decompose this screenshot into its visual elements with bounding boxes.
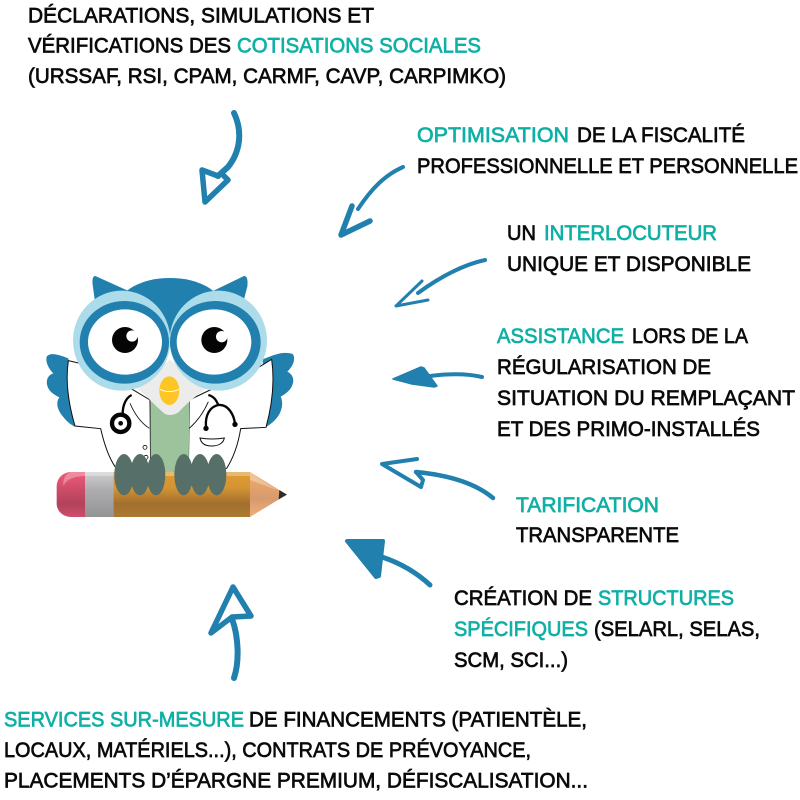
text: interlocuteur: UN [507, 221, 536, 245]
text: structures: STRUCTURES [598, 586, 734, 610]
text: assistance: RÉGULARISATION DE [497, 354, 711, 379]
text: cotisations sociales: COTISATIONS SOCIALES [237, 34, 481, 58]
text: structures [454, 585, 760, 672]
text: cotisations sociales [28, 2, 506, 88]
text: cotisations sociales: DÉCLARATIONS, SIMULATIONS ET [28, 2, 374, 28]
text: assistance: LORS DE LA [632, 324, 749, 348]
text: interlocuteur: UNIQUE ET DISPONIBLE [507, 252, 751, 276]
text: services sur-mesure [4, 706, 588, 792]
icon: stethoscope [112, 395, 238, 432]
icon: coat pocket [200, 438, 224, 446]
text: cotisations sociales: VÉRIFICATIONS DES [28, 32, 231, 58]
arrow: from tarification [382, 459, 493, 498]
text: services sur-mesure: PLACEMENTS D’ÉPARGNE PREMIUM, DÉFISCALISATION... [4, 768, 588, 792]
arrow: from interlocuteur [396, 260, 485, 306]
icon: claws [114, 454, 226, 495]
text: services sur-mesure: SERVICES SUR-MESURE [4, 708, 244, 732]
arrow: from services [211, 587, 251, 678]
icon: wings [46, 353, 294, 427]
icon: glasses [73, 291, 267, 391]
icon: lab coat [67, 359, 273, 473]
icon: coat buttons [143, 445, 148, 459]
text: assistance: SITUATION DU REMPLAÇANT [497, 386, 795, 410]
icon: beak [159, 376, 179, 405]
illustration: owl on pencil [46, 276, 294, 517]
arrow: from optimisation [341, 167, 403, 235]
text: structures: (SELARL, SELAS, [594, 617, 760, 641]
text: structures: CRÉATION DE [454, 585, 592, 610]
text: optimisation: OPTIMISATION [417, 123, 569, 147]
text: services sur-mesure: DE FINANCEMENTS (PATIENTÈLE, [249, 706, 587, 732]
text: assistance [497, 324, 795, 441]
text: assistance: ASSISTANCE [497, 324, 624, 348]
text: structures: SCM, SCI...) [454, 648, 568, 672]
arrow: from assistance [393, 367, 482, 387]
text: structures: SPÉCIFIQUES [454, 616, 588, 641]
icon: pencil [57, 472, 287, 517]
text: optimisation: DE LA FISCALITÉ [577, 122, 745, 147]
icon: ears and head [92, 276, 248, 415]
arrow: from cotisations [202, 113, 239, 202]
text: assistance: ET DES PRIMO-INSTALLÉS [497, 416, 760, 441]
text: cotisations sociales: (URSSAF, RSI, CPAM, CARMF, CAVP, CARPIMKO) [28, 64, 506, 88]
arrow: from structures [347, 541, 430, 585]
text: tarification: TRANSPARENTE [516, 523, 679, 547]
text: interlocuteur [507, 221, 751, 276]
text: interlocuteur: INTERLOCUTEUR [544, 221, 717, 245]
text: tarification [516, 493, 679, 547]
text: tarification: TARIFICATION [516, 493, 659, 517]
text: services sur-mesure: LOCAUX, MATÉRIELS...), CONTRATS DE PRÉVOYANCE, [4, 737, 531, 762]
text: optimisation [417, 122, 798, 178]
icon: scrub shirt [151, 402, 189, 477]
